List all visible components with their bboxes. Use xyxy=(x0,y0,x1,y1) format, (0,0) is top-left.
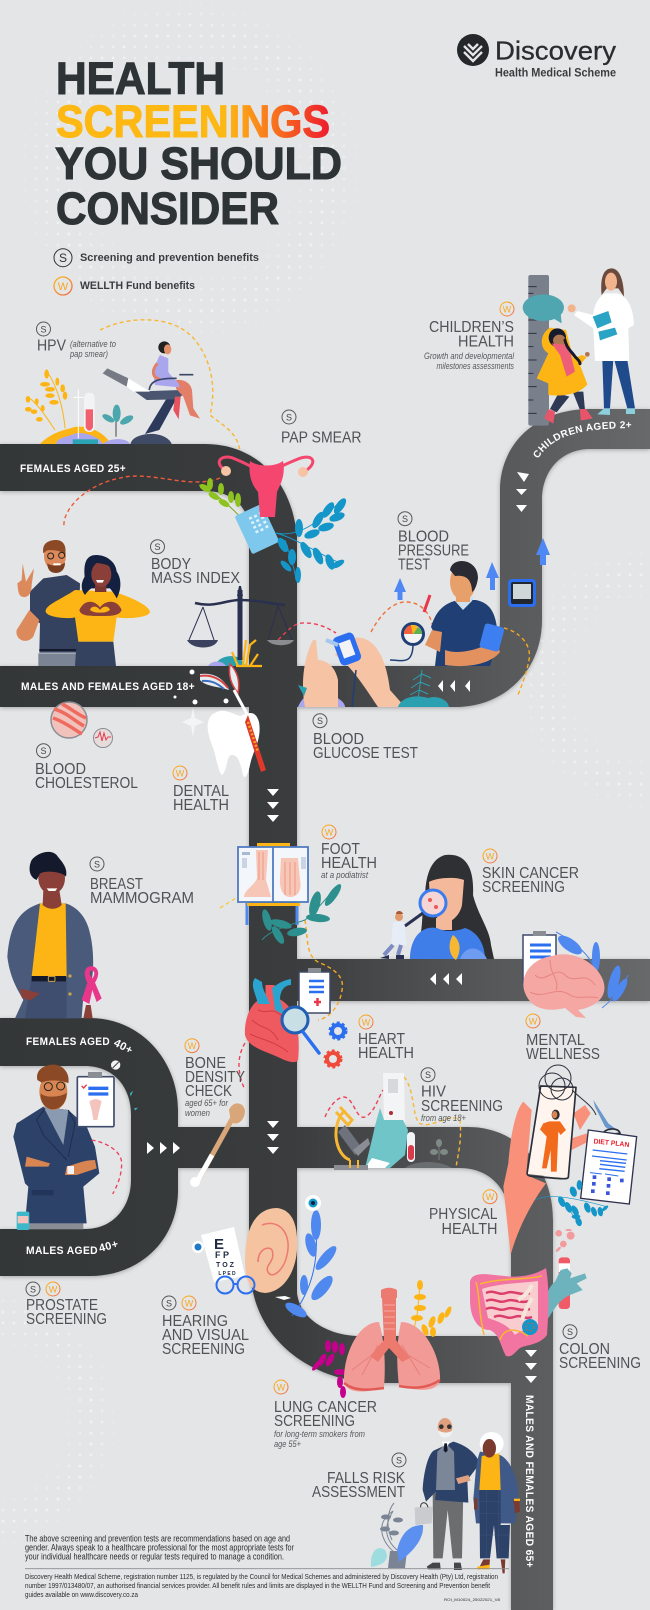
label: body mass index xyxy=(150,540,240,587)
label: hearing and visual screening: S xyxy=(166,1298,172,1308)
label: breast mammogram: BREAST xyxy=(90,876,143,893)
label: bone density check xyxy=(185,1039,245,1118)
title: CONSIDER xyxy=(56,183,279,234)
label: mental wellness: MENTAL xyxy=(526,1032,585,1049)
label: falls risk assessment: S xyxy=(396,1456,402,1466)
road label: males aged 40+ xyxy=(26,1238,120,1257)
label: HIV screening: SCREENING xyxy=(421,1098,503,1115)
label: lung cancer screening: age 55+ xyxy=(274,1439,301,1449)
label: hearing and visual screening xyxy=(162,1296,249,1358)
road label: females aged 25+: FEMALES AGED 25+ xyxy=(20,463,126,475)
label: physical health: W xyxy=(486,1192,495,1202)
illustration: prostate doctor with clipboard xyxy=(13,1060,138,1230)
label: children's health: milestones assessments xyxy=(436,361,514,371)
label: bone density check: W xyxy=(188,1041,197,1051)
illustration: colon xyxy=(470,1268,548,1356)
road label: males aged 40+: 40+ xyxy=(98,1238,120,1255)
legend: benefit types: WELLTH Fund benefits xyxy=(80,280,195,292)
label: blood pressure test: BLOOD xyxy=(398,529,449,546)
illustration: physical health hand, phone and diet plan: DIET PLAN xyxy=(593,1138,630,1149)
illustration: HIV test, gloved hand, microscope and test tube xyxy=(334,1073,452,1170)
label: children's health: W xyxy=(503,304,512,314)
label: falls risk assessment: ASSESSMENT xyxy=(312,1484,405,1501)
label: blood pressure test xyxy=(398,512,469,574)
logo: Discovery Health Medical Scheme xyxy=(457,34,616,80)
road label: males and females aged 65+: MALES AND FEMALES AGED 65+ xyxy=(523,1395,535,1568)
label: prostate screening: W xyxy=(49,1284,58,1294)
label: blood pressure test: PRESSURE xyxy=(398,543,469,560)
label: prostate screening: S xyxy=(30,1284,36,1294)
label: blood cholesterol: S xyxy=(40,746,47,756)
title xyxy=(55,53,342,234)
label: breast mammogram: S xyxy=(94,860,100,870)
label: heart health: HEALTH xyxy=(358,1045,414,1062)
fine print xyxy=(25,1574,501,1602)
label: foot health: W xyxy=(325,828,334,838)
label: HIV screening: HIV xyxy=(421,1084,446,1101)
label: HIV screening xyxy=(421,1068,503,1123)
label: physical health: HEALTH xyxy=(442,1221,498,1238)
illustration: heart, clipboard, magnifier and gears xyxy=(245,968,346,1068)
label: bone density check: women xyxy=(185,1108,210,1118)
logo: Discovery Health Medical Scheme: Health Medical Scheme xyxy=(495,68,616,80)
illustration: toothpaste, tooth and toothbrush xyxy=(174,664,266,777)
label: skin cancer screening: W xyxy=(486,852,495,862)
illustration: blood pressure man, gauge and monitor xyxy=(390,538,550,666)
label: foot health: HEALTH xyxy=(321,855,377,872)
dashed route lines xyxy=(64,320,529,1167)
label: HIV screening: from age 18+ xyxy=(421,1113,466,1123)
label: hearing and visual screening: W xyxy=(185,1298,194,1308)
fine print: guides available on www.discovery.co.za xyxy=(25,1592,138,1599)
label: blood glucose test: BLOOD xyxy=(313,731,364,748)
label: lung cancer screening: LUNG CANCER xyxy=(274,1399,377,1416)
label: foot health xyxy=(321,825,377,880)
illustration: balance scale xyxy=(187,586,294,666)
label: prostate screening xyxy=(26,1282,107,1328)
label: bone density check: CHECK xyxy=(185,1083,232,1100)
fine print: number 1997/013480/07, an authorised financial services provider. All benefit rules and limits are displayed in the WELLTH Fund and Screening and Prevention benefit xyxy=(25,1583,490,1590)
label: heart health: W xyxy=(362,1018,371,1028)
disclaimer: gender. Always speak to a healthcare professional for the most appropriate tests for xyxy=(25,1543,294,1553)
illustration: hearing and vision: eye chart, ear, glasses, blue leaves xyxy=(192,1195,339,1320)
label: hearing and visual screening: HEARING xyxy=(162,1313,228,1330)
logo: Discovery Health Medical Scheme: Discovery xyxy=(495,36,616,66)
label: pap smear: S xyxy=(286,412,292,422)
illustration: HPV exam chair and plants xyxy=(25,341,200,444)
label: lung cancer screening: for long-term smokers from xyxy=(274,1429,365,1439)
label: HIV screening: S xyxy=(425,1070,431,1080)
label: blood glucose test: S xyxy=(317,716,323,726)
fine print: ROI_M10024_25022021_V8 xyxy=(444,1597,501,1602)
label: body mass index: BODY xyxy=(151,556,191,573)
illustration: artery and pulse icons xyxy=(51,702,112,748)
legend: benefit types: W xyxy=(58,281,69,293)
label: prostate screening: PROSTATE xyxy=(26,1297,98,1314)
label: children's health: CHILDREN’S xyxy=(429,319,514,336)
label: colon screening: S xyxy=(567,1327,573,1337)
label: dental health xyxy=(173,766,229,814)
road label: females aged 40+ xyxy=(26,1036,135,1057)
road direction arrows xyxy=(147,472,537,1383)
label: heart health: HEART xyxy=(358,1031,405,1048)
label: falls risk assessment xyxy=(312,1453,406,1501)
label: skin cancer screening xyxy=(482,849,579,896)
title: HEALTH xyxy=(56,53,225,104)
label: breast mammogram: MAMMOGRAM xyxy=(90,890,194,907)
label: breast mammogram xyxy=(90,857,194,907)
label: HPV: (alternative to xyxy=(70,339,116,349)
label: colon screening xyxy=(559,1325,641,1372)
label: lung cancer screening: W xyxy=(277,1382,286,1392)
label: blood cholesterol: BLOOD xyxy=(35,761,86,778)
illustration: lungs with leaves xyxy=(311,1280,453,1398)
label: blood cholesterol xyxy=(35,744,138,792)
illustration: teal foot leaves xyxy=(260,882,344,946)
illustration: bone xyxy=(190,1103,245,1187)
road label: males aged 40+: MALES AGED xyxy=(26,1245,98,1257)
legend: benefit types xyxy=(54,249,259,295)
illustration: hearing and vision: eye chart, ear, glasses, blue leaves: E xyxy=(214,1236,224,1253)
legend: benefit types: S xyxy=(59,251,67,265)
illustration: potted plant xyxy=(371,1503,423,1568)
label: foot health: at a podiatrist xyxy=(321,870,368,880)
illustration: hearing and vision: eye chart, ear, glasses, blue leaves: L P E D xyxy=(218,1271,236,1277)
label: body mass index: S xyxy=(154,542,161,552)
label: children's health: HEALTH xyxy=(458,334,514,351)
label: HPV: HPV xyxy=(37,338,66,355)
illustration: couple (body mass index) xyxy=(16,540,150,666)
disclaimer xyxy=(25,1534,294,1562)
illustration: hearing and vision: eye chart, ear, glasses, blue leaves: F P xyxy=(215,1250,229,1260)
label: lung cancer screening xyxy=(274,1380,377,1449)
label: HPV: S xyxy=(40,324,47,334)
road label: children aged 2+: CHILDREN AGED 2+ xyxy=(534,421,632,458)
label: dental health: HEALTH xyxy=(173,797,229,814)
label: body mass index: MASS INDEX xyxy=(151,570,240,587)
label: heart health xyxy=(358,1015,414,1062)
illustration: hearing and vision: eye chart, ear, glasses, blue leaves: T O Z xyxy=(216,1262,235,1269)
label: blood glucose test xyxy=(313,714,418,762)
label: HPV: pap smear) xyxy=(69,349,108,359)
label: falls risk assessment: FALLS RISK xyxy=(327,1470,405,1487)
label: mental wellness: W xyxy=(529,1016,538,1026)
disclaimer: your individual healthcare needs or regular tests required to manage a condition. xyxy=(25,1552,284,1562)
title: SCREENINGS xyxy=(56,96,330,147)
label: hearing and visual screening: AND VISUAL xyxy=(162,1327,249,1344)
illustration: blue branches xyxy=(276,496,348,583)
illustration: uterus, pill pack and green leaves xyxy=(198,457,313,554)
label: colon screening: COLON xyxy=(559,1341,610,1358)
label: bone density check: DENSITY xyxy=(185,1069,245,1086)
label: hearing and visual screening: SCREENING xyxy=(162,1341,245,1358)
label: skin cancer screening: SCREENING xyxy=(482,879,565,896)
label: blood glucose test: GLUCOSE TEST xyxy=(313,745,418,762)
label: HPV xyxy=(36,322,116,359)
label: lung cancer screening: SCREENING xyxy=(274,1413,355,1430)
fine print: Discovery Health Medical Scheme, registration number 1125, is regulated by the Council for Medical Schemes and administered by Discovery Health (Pty) Ltd, registration xyxy=(25,1574,498,1581)
label: prostate screening: SCREENING xyxy=(26,1311,107,1328)
label: blood cholesterol: CHOLESTEROL xyxy=(35,775,138,792)
label: pap smear: PAP SMEAR xyxy=(281,430,362,447)
illustration: mental wellness brain, clipboard and leaves xyxy=(523,931,630,1018)
title: YOU SHOULD xyxy=(55,138,342,189)
label: mental wellness xyxy=(526,1014,600,1063)
illustration: glucose test hands and meter xyxy=(298,631,449,707)
illustration: lanyard on phone xyxy=(539,1065,596,1115)
label: bone density check: aged 65+ for xyxy=(185,1098,229,1108)
label: blood pressure test: TEST xyxy=(398,557,430,574)
illustration: skin cancer woman with magnifier and small doctor xyxy=(380,855,494,960)
illustration: elderly couple and plant xyxy=(415,1418,520,1573)
road network xyxy=(0,409,650,1610)
label: dental health: DENTAL xyxy=(173,783,229,800)
label: blood pressure test: S xyxy=(402,514,408,524)
label: foot health: FOOT xyxy=(321,841,360,858)
label: skin cancer screening: SKIN CANCER xyxy=(482,865,579,882)
legend: benefit types: Screening and prevention benefits xyxy=(80,252,259,264)
label: pap smear xyxy=(281,410,362,447)
illustration: foot x-ray light box xyxy=(238,843,308,925)
illustration: height ruler, doctor and child xyxy=(523,268,635,426)
label: physical health xyxy=(429,1190,498,1238)
disclaimer: The above screening and prevention tests are recommendations based on age and xyxy=(25,1534,290,1544)
road label: females aged 40+: FEMALES AGED xyxy=(26,1036,110,1048)
road label: females aged 40+: 40+ xyxy=(112,1037,135,1057)
label: children's health xyxy=(424,302,515,371)
label: mental wellness: WELLNESS xyxy=(526,1046,600,1063)
label: bone density check: BONE xyxy=(185,1055,226,1072)
label: physical health: PHYSICAL xyxy=(429,1206,498,1223)
road label: males and females aged 18+: MALES AND FEMALES AGED 18+ xyxy=(21,681,195,693)
label: dental health: W xyxy=(176,768,185,778)
label: children's health: Growth and developmental xyxy=(424,351,515,361)
illustration: breast mammogram woman with ribbon xyxy=(7,852,102,1018)
illustration: physical health hand, phone and diet plan xyxy=(503,1086,637,1318)
